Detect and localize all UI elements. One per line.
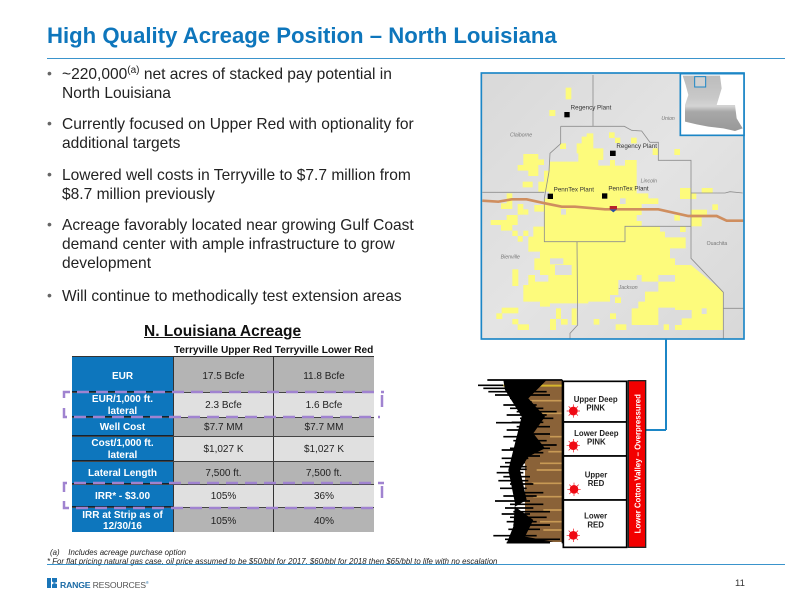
text: lateral — [108, 406, 137, 416]
text: 40% — [314, 516, 334, 527]
bullet 4: Acreage favorably located near growing Gulf Coast — [62, 216, 414, 234]
text: Lateral Length — [88, 468, 157, 479]
bullet 3 — [62, 166, 411, 202]
text: lateral — [108, 450, 137, 460]
title rule — [47, 58, 785, 59]
bullet 1: ~220,000(a) net acres of stacked pay potential in — [62, 65, 392, 83]
red overpressured bar — [628, 381, 646, 547]
connector line — [665, 339, 666, 430]
well log brown fill — [503, 381, 562, 542]
formation labels: PINK — [587, 438, 606, 447]
parish labels: Bienville — [501, 255, 520, 261]
formation labels: Upper Deep — [574, 395, 618, 404]
yellow acreage — [491, 88, 723, 330]
text: 1.6 Bcfe — [306, 400, 342, 411]
text: $7.7 MM — [204, 422, 243, 433]
bullet 3: $8.7 million previously — [62, 186, 215, 202]
parish labels: Union — [661, 116, 675, 122]
page number: 11 — [735, 578, 745, 589]
plant labels: Regency Plant — [616, 143, 657, 150]
text: IRR* - $3.00 — [95, 491, 150, 502]
column headers: Terryville Upper Red Terryville Lower Red — [174, 345, 373, 356]
text: $7.7 MM — [305, 422, 343, 433]
bullet 2: additional targets — [62, 134, 180, 152]
parish labels: Jackson — [618, 285, 638, 291]
bullet 1 — [62, 65, 392, 102]
text: 17.5 Bcfe — [202, 371, 245, 382]
bullet 4 — [62, 216, 414, 272]
stratigraphic column diagram — [478, 379, 646, 548]
formation labels: RED — [588, 479, 605, 488]
formation labels: Upper — [585, 470, 607, 479]
connector stub — [646, 429, 666, 430]
text: $1,027 K — [304, 444, 344, 455]
bullet markers: • — [47, 287, 52, 303]
bullet 1: North Louisiana — [62, 85, 171, 102]
text: Cost/1,000 ft. — [91, 438, 154, 449]
parish boundaries — [482, 75, 743, 339]
highway I-20 — [482, 199, 743, 221]
plant labels — [554, 105, 657, 193]
logo mark — [47, 578, 57, 588]
footer rule — [47, 564, 785, 565]
formation boxes — [563, 381, 627, 547]
perforation starbursts — [567, 404, 581, 542]
bullet markers: • — [47, 216, 52, 232]
formation labels: Lower Deep — [574, 429, 619, 438]
text: $1,027 K — [203, 444, 244, 455]
text: 7,500 ft. — [306, 468, 342, 479]
text: 105% — [211, 516, 236, 527]
gray cut-outs — [550, 198, 707, 314]
plant markers — [548, 112, 616, 199]
map background — [481, 73, 744, 339]
text: 105% — [211, 491, 236, 502]
formation labels: Lower — [584, 512, 607, 521]
well log trace — [478, 380, 562, 543]
plant labels: PennTex Plant — [554, 186, 594, 193]
logo: Range Resources — [47, 578, 149, 590]
bullet markers: • — [47, 166, 52, 182]
bullet 3: Lowered well costs in Terryville to $7.7 million from — [62, 166, 411, 184]
parish labels: Lincoln — [641, 179, 657, 185]
bullet 4: development — [62, 254, 151, 272]
bullet markers — [47, 65, 52, 303]
text: IRR at Strip as of — [82, 510, 163, 520]
formation labels — [574, 395, 619, 530]
bullet 2: Currently focused on Upper Red with optionality for — [62, 116, 414, 132]
text: 7,500 ft. — [205, 468, 242, 479]
red overpressured bar: Lower Cotton Valley – Overpressured — [633, 394, 642, 533]
parish labels: Claiborne — [510, 133, 532, 139]
plant labels: Regency Plant — [571, 105, 612, 112]
map frame — [481, 73, 744, 339]
formation labels: RED — [587, 521, 604, 530]
table rows — [72, 356, 374, 532]
bullet list — [47, 65, 414, 304]
text: 11.8 Bcfe — [303, 371, 345, 382]
text: 2.3 Bcfe — [205, 400, 242, 411]
bullet 5: Will continue to methodically test extension areas — [62, 288, 402, 304]
dashed highlight boxes — [62, 390, 384, 510]
text: 36% — [314, 491, 334, 502]
plant labels: PennTex Plant — [608, 186, 649, 193]
text: Well Cost — [100, 422, 145, 433]
parish labels — [501, 116, 727, 291]
inset Louisiana map — [680, 74, 744, 135]
table heading: N. Louisiana Acreage — [144, 323, 301, 340]
bullet 2 — [62, 116, 414, 152]
bullet markers: • — [47, 65, 52, 81]
parish labels: Ouachita — [707, 241, 727, 247]
map panel — [480, 72, 745, 340]
highway shield — [610, 206, 617, 212]
footnote *: * For flat pricing natural gas case, oil price assumed to be $50/bbl for 2017, $60/bbl for 2018 then $65/bbl to life with no escalation — [47, 556, 497, 566]
footnote (a): (a) Includes acreage purchase option — [50, 548, 186, 557]
bullet 4: demand center with ample infrastructure to grow — [62, 236, 395, 252]
logo text: RANGE RESOURCES® — [60, 580, 149, 590]
title: High Quality Acreage Position – North Louisiana — [47, 23, 557, 48]
text: 12/30/16 — [103, 521, 142, 532]
text: EUR — [112, 371, 133, 382]
formation labels: PINK — [586, 404, 605, 413]
text: EUR/1,000 ft. — [92, 394, 153, 405]
bullet markers: • — [47, 115, 52, 131]
